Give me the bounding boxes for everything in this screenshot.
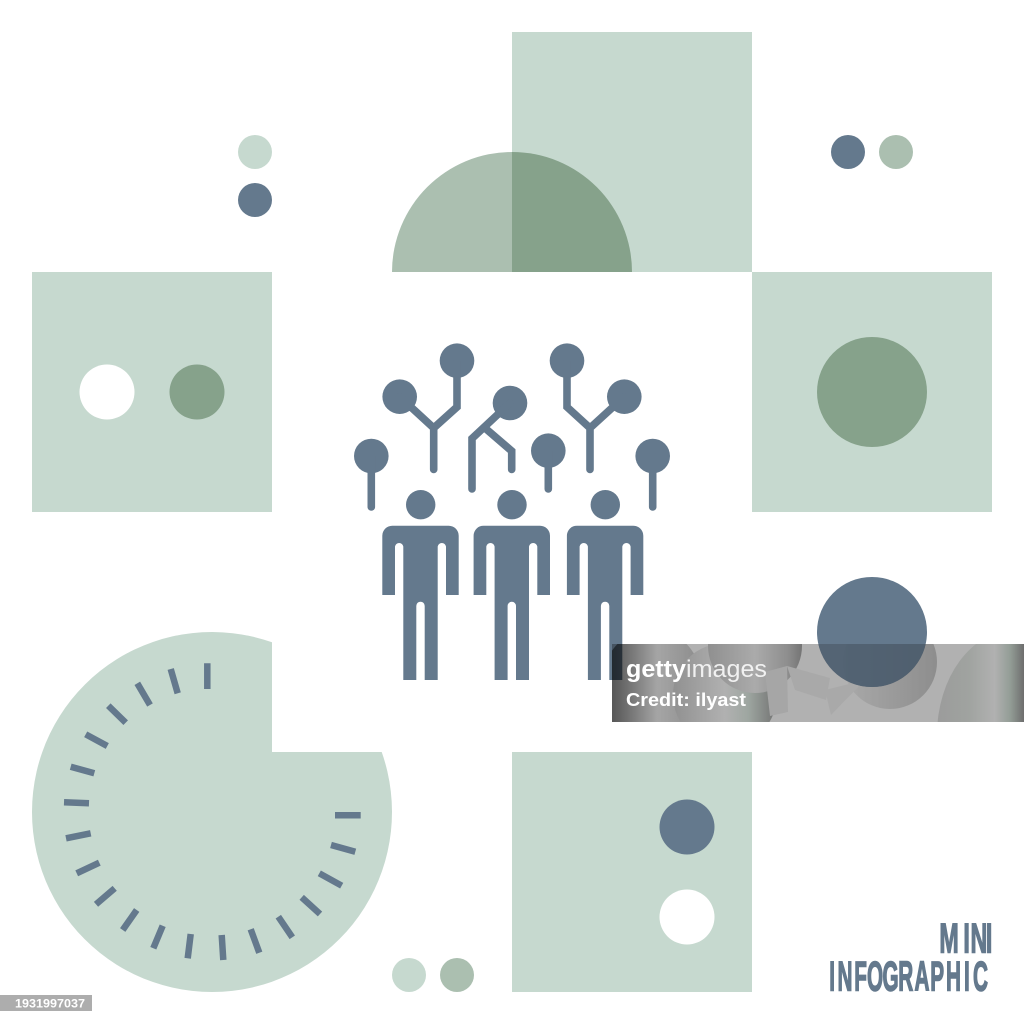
person right <box>567 490 643 680</box>
decorative dots: upper left pair <box>238 135 272 217</box>
title: mini infographic: INFOGRAPHIC <box>829 953 988 1000</box>
half circle: right tone <box>512 152 632 272</box>
large blue circle <box>817 577 927 687</box>
title: mini infographic: MINI <box>939 917 992 962</box>
decorative dots: bottom pair <box>392 958 474 992</box>
watermark: blue circle seen through banner <box>818 644 926 687</box>
branching nodes <box>354 343 670 507</box>
watermark: logo text: gettyimages <box>626 656 767 683</box>
watermark: credit text: Credit: ilyast <box>626 689 746 710</box>
half circle: left tone <box>392 152 512 272</box>
panel: bottom square with two dots <box>512 752 752 992</box>
watermark: banner <box>612 644 1024 722</box>
image id tag: 1931997037 <box>15 996 85 1010</box>
panel: left square with two dots <box>32 272 272 512</box>
icon: three people with branching idea nodes <box>354 343 670 680</box>
image id tag <box>0 995 92 1011</box>
chart: notched dial with tick marks <box>32 632 392 992</box>
person middle <box>474 490 550 680</box>
panel: top square with half circle <box>392 32 752 272</box>
person left <box>382 490 459 680</box>
decorative dots: upper right pair <box>831 135 913 169</box>
panel: right square with circle <box>752 272 992 512</box>
title: mini infographic <box>829 917 992 1000</box>
